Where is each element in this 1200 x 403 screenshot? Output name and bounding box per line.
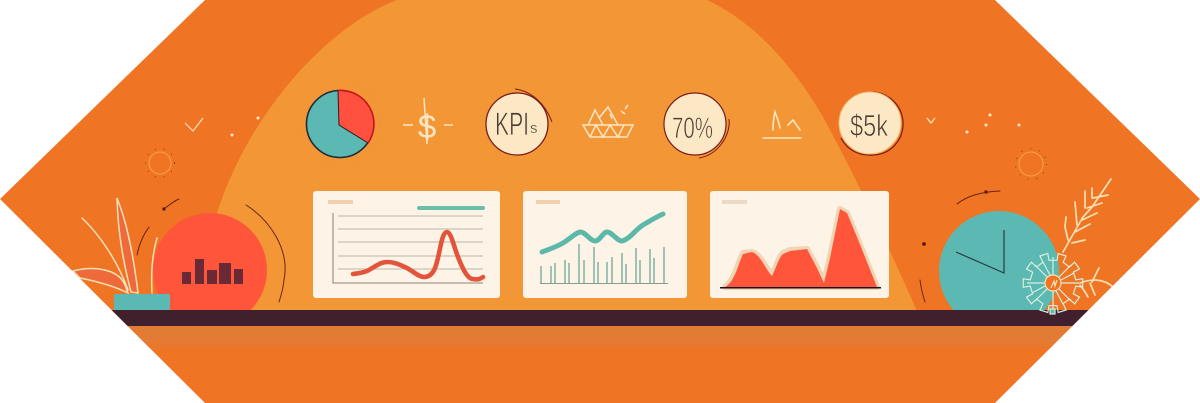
right check mark (927, 118, 935, 123)
left sun (146, 148, 174, 178)
$5k badge (839, 92, 903, 155)
floor strip (100, 326, 1100, 350)
KPIs badge (486, 89, 552, 155)
crown triangles icon (583, 105, 633, 137)
$5k badge: $5k (850, 108, 888, 143)
dollar icon (403, 98, 453, 145)
right sun (1016, 148, 1046, 180)
left plant (73, 198, 157, 293)
plant pot (114, 294, 170, 311)
70% badge (664, 93, 729, 158)
panel: trend and bars card (523, 191, 687, 298)
right dark arcs (920, 191, 1000, 302)
right sparkles (966, 114, 1020, 134)
red circle with bar icon (153, 213, 267, 310)
KPIs badge: s (530, 120, 538, 137)
left dark arcs (137, 199, 285, 302)
KPIs badge: KPI (495, 106, 529, 142)
right branch (1063, 179, 1113, 297)
panel: line chart card (313, 191, 500, 298)
panel: area chart card (710, 191, 889, 298)
left check mark (185, 118, 203, 131)
dollar icon: $ (418, 108, 436, 145)
70% badge: 70% (672, 112, 713, 145)
squiggle chart icon (763, 112, 801, 138)
central hill (190, 0, 917, 311)
pie chart icon (299, 83, 381, 165)
left sparkles (230, 116, 260, 136)
shelf (100, 310, 1100, 326)
teal clock circle (939, 211, 1059, 310)
gear flower (1023, 254, 1083, 314)
